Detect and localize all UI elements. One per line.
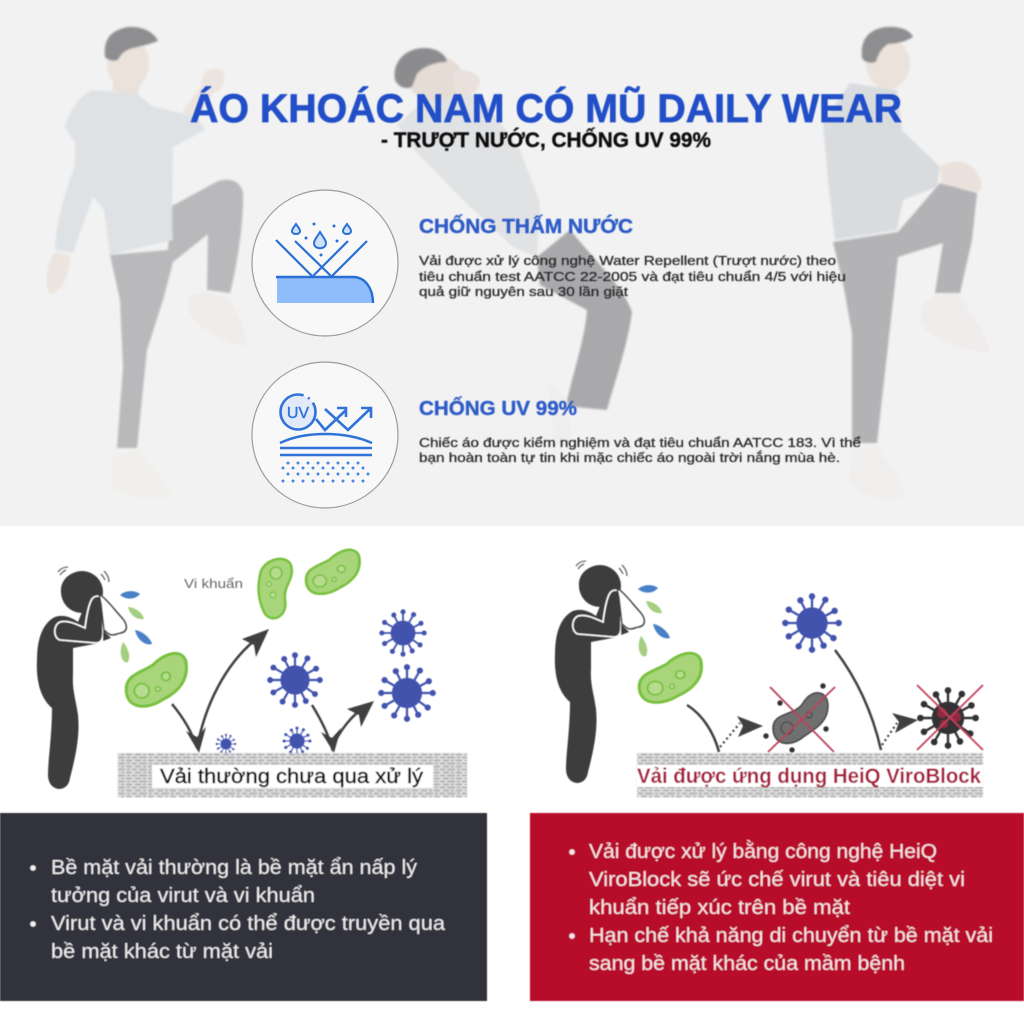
panel: ViroBlock fabric notes: khuẩn tiếp xúc trên bề mặt (589, 897, 850, 919)
panel: ViroBlock fabric notes: Vải được xử lý bằng công nghệ HeiQ (589, 840, 937, 863)
fabric strip: treated: Vải được ứng dụng HeiQ ViroBlock (637, 765, 981, 788)
figure: left model (47, 27, 246, 498)
white lower section (0, 526, 1024, 1024)
diagram: untreated fabric (37, 550, 467, 797)
fabric strip: untreated (118, 753, 467, 797)
icon: upper bacterium left (259, 559, 292, 618)
text: water resistance description: tiêu chuẩn test AATCC 22-2005 và đạt tiêu chuẩn 4/5 với hiệu (419, 269, 846, 284)
icon: sneezing person (555, 561, 670, 783)
heading: water resistance: CHỐNG THẤM NƯỚC (419, 214, 633, 238)
panel: untreated fabric notes (0, 813, 487, 1001)
text: UV protection description: Chiếc áo được kiểm nghiệm và đạt tiêu chuẩn AATCC 183. Vì thể (419, 435, 861, 450)
icon: UV protection: UV (287, 405, 309, 422)
arrow: virus to fabric (835, 650, 918, 750)
icon: water repellent (252, 190, 398, 336)
icon: upper bacterium right (306, 550, 360, 594)
label: bacteria: Vi khuẩn (184, 576, 243, 591)
icon: dead virus (917, 685, 983, 750)
icon: dead bacterium (763, 683, 835, 753)
panel: ViroBlock fabric notes: Hạn chế khả năng di chuyển từ bề mặt vải (589, 925, 993, 947)
fabric strip: untreated: Vải thường chưa qua xử lý (160, 766, 423, 788)
arrow: bacteria to fabric (687, 705, 763, 752)
top background section (0, 0, 1024, 526)
panel: ViroBlock fabric notes: ViroBlock sẽ ức chế virut và tiêu diệt vi (589, 869, 965, 891)
text: water resistance description: quả giữ nguyên sau 30 lần giặt (419, 284, 628, 299)
subtitle: - TRƯỢT NƯỚC, CHỐNG UV 99% (381, 128, 711, 152)
icon: viruses (216, 609, 436, 755)
text: UV protection description: bạn hoàn toàn tự tin khi mặc chiếc áo ngoài trời nắng mùa hè. (419, 450, 840, 465)
text: water resistance description (419, 253, 846, 299)
panel: ViroBlock fabric notes (530, 813, 1024, 1001)
arrow: virus bounce (312, 701, 374, 753)
panel: untreated fabric notes: Virut và vi khuẩn có thể được truyền qua (51, 913, 446, 935)
figure: right model (823, 27, 990, 499)
panel: untreated fabric notes: Bề mặt vải thường là bề mặt ẩn nấp lý (51, 857, 417, 879)
icon: UV protection (252, 362, 398, 508)
arrow: bacteria bounce (172, 629, 269, 753)
icon: virus (782, 593, 842, 653)
icon: main bacterium (126, 653, 186, 706)
panel: ViroBlock fabric notes: sang bề mặt khác của mầm bệnh (589, 953, 905, 975)
fabric strip: treated (637, 753, 983, 797)
figure: middle model (395, 48, 632, 445)
panel: untreated fabric notes: tưởng của virut và vi khuẩn (51, 885, 315, 907)
text: UV protection description (419, 435, 861, 465)
heading: UV protection: CHỐNG UV 99% (419, 396, 577, 420)
diagram: HeiQ ViroBlock fabric (555, 561, 983, 797)
text: water resistance description: Vải được xử lý công nghệ Water Repellent (Trượt nước) theo (419, 253, 836, 268)
icon: sneezing person (37, 567, 152, 789)
icon: bacterium (639, 653, 701, 702)
main title: ÁO KHOÁC NAM CÓ MŨ DAILY WEAR (190, 85, 902, 131)
panel: untreated fabric notes: bề mặt khác từ mặt vải (51, 941, 273, 963)
